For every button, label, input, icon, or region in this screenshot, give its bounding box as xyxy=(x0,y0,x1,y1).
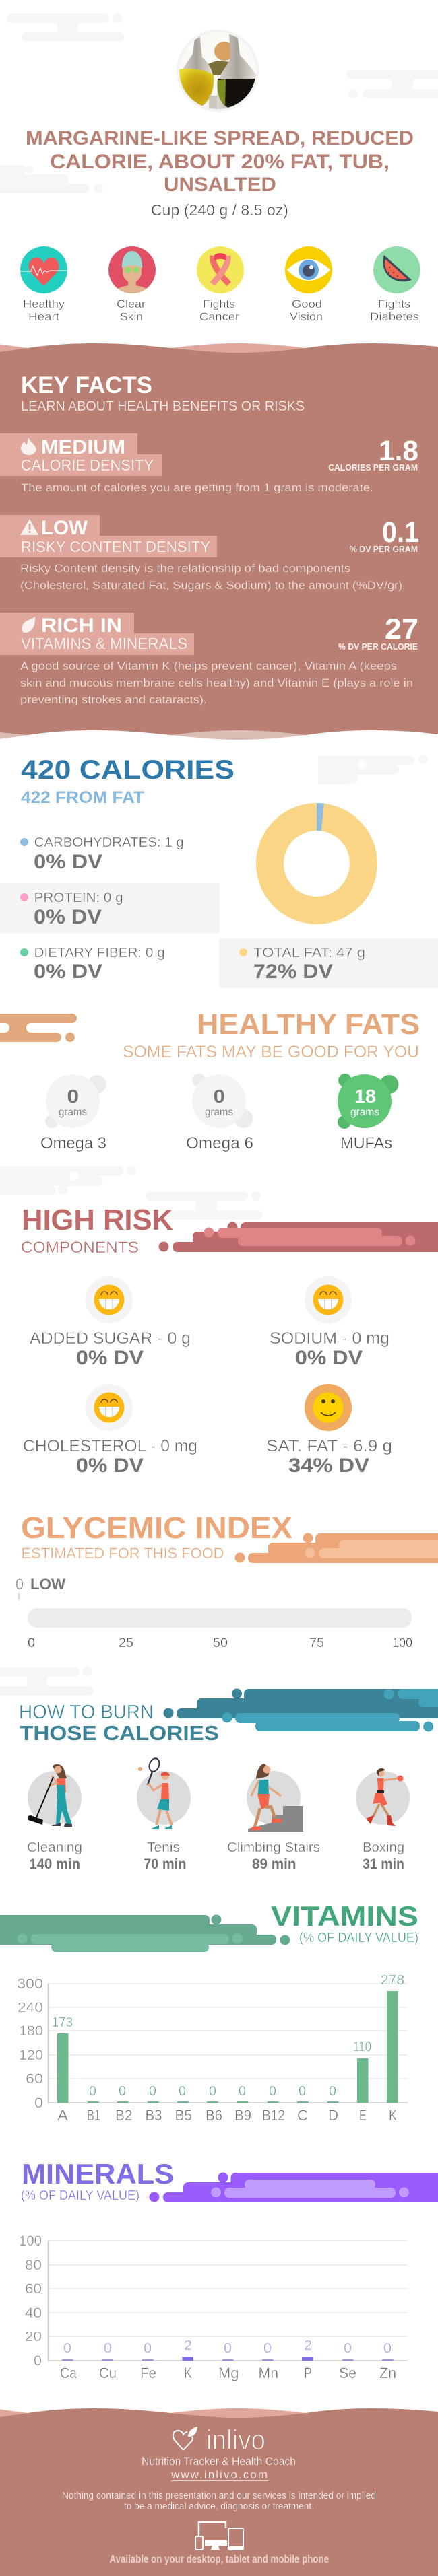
fact: risky content density: 0.1 xyxy=(382,516,419,549)
bar chart: vitamins: 300 xyxy=(17,1976,43,1992)
activity: cleaning: Cleaning xyxy=(27,1840,82,1855)
activity: tennis xyxy=(137,1757,191,1872)
bar chart: vitamins: B1 xyxy=(87,2107,100,2124)
bar chart: minerals: 0 xyxy=(224,2341,232,2356)
stat: omega 6 xyxy=(186,1074,253,1152)
heading: minerals: MINERALS xyxy=(22,2158,174,2190)
title: UNSALTED xyxy=(164,174,276,196)
panel: calories xyxy=(0,755,438,988)
gauge scale: 100 xyxy=(392,1636,412,1650)
background cloud: top right xyxy=(346,70,438,98)
heading: glycemic index: GLYCEMIC INDEX xyxy=(21,1510,292,1545)
fact: calorie density: CALORIES PER GRAM xyxy=(328,462,418,473)
fact: rich in vitamins and minerals: 27 xyxy=(385,613,418,646)
bar chart: minerals: 0 xyxy=(383,2341,392,2356)
stat: MUFAs: MUFAs xyxy=(340,1134,392,1152)
icon: good vision: Vision xyxy=(290,310,323,323)
gauge scale: 50 xyxy=(213,1636,228,1650)
icon: good vision xyxy=(285,246,332,323)
fact: calorie density: The amount of calories you are getting from 1 gram is moderate. xyxy=(21,481,373,494)
gauge value marker: LOW xyxy=(30,1576,65,1593)
stat: omega 6: grams xyxy=(205,1107,233,1118)
bar chart: vitamins: B5 xyxy=(175,2107,192,2124)
stat: MUFAs xyxy=(338,1074,399,1152)
icon: good vision: Good xyxy=(292,298,322,310)
background cloud xyxy=(318,755,428,784)
bar chart: vitamins: 0 xyxy=(329,2084,336,2099)
activity: cleaning xyxy=(27,1764,82,1872)
bar chart: vitamins: B2 xyxy=(115,2107,132,2124)
bar chart: minerals: Mn xyxy=(259,2365,278,2381)
subheading: glycemic index: ESTIMATED FOR THIS FOOD xyxy=(22,1545,224,1562)
gauge value marker: 0 xyxy=(15,1576,24,1593)
icon: clear skin xyxy=(108,246,156,323)
gauge value marker xyxy=(15,1576,65,1600)
bar chart: minerals: P xyxy=(304,2365,312,2381)
disclaimer xyxy=(62,2490,376,2512)
bar chart: vitamins: 120 xyxy=(19,2048,43,2063)
logo: inlivo xyxy=(173,2424,265,2456)
bar chart: vitamins: 278 xyxy=(381,1973,404,1988)
activity: climbing stairs: 89 min xyxy=(252,1856,296,1872)
bar chart: minerals: Mg xyxy=(218,2365,239,2381)
panel: how to burn those calories xyxy=(19,1688,438,1872)
heading: those calories: THOSE CALORIES xyxy=(20,1721,219,1745)
tagline: Nutrition Tracker & Health Coach xyxy=(142,2455,296,2468)
fact: risky content density: (Cholesterol, Saturated Fat, Sugars & Sodium) to the amount (%DV/gr). xyxy=(20,579,406,592)
fact: calorie density xyxy=(0,433,418,494)
panel: minerals xyxy=(19,2158,438,2381)
subheading: from fat: 422 FROM FAT xyxy=(21,788,144,807)
bar chart: minerals: Cu xyxy=(99,2365,117,2381)
heading: key facts: KEY FACTS xyxy=(21,372,152,398)
bar chart: minerals: 100 xyxy=(19,2233,42,2249)
item: added sugar: 0% DV xyxy=(76,1347,144,1369)
legend: dietary fiber xyxy=(20,946,165,983)
activity: tennis: Tenis xyxy=(147,1840,180,1855)
bar chart: minerals: 20 xyxy=(25,2329,42,2344)
icon: fights diabetes xyxy=(370,246,420,323)
bar chart: minerals: Fe xyxy=(140,2365,156,2381)
serving size: Cup (240 g / 8.5 oz) xyxy=(151,201,288,219)
fact: risky content density: % DV PER GRAM xyxy=(350,544,418,554)
bar chart: minerals: 0 xyxy=(63,2341,71,2356)
availability note: Available on your desktop, tablet and mobile phone xyxy=(109,2554,329,2565)
bar chart: minerals: 2 xyxy=(184,2338,192,2353)
panel: footer xyxy=(0,2408,438,2576)
bar chart: vitamins: 0 xyxy=(299,2084,306,2099)
item: added sugar xyxy=(30,1276,191,1369)
logo: inlivo: inlivo xyxy=(206,2424,265,2456)
bar chart: minerals: 0 xyxy=(104,2341,112,2356)
item: cholesterol: 0% DV xyxy=(76,1455,144,1477)
icon: fights cancer xyxy=(197,246,244,323)
decorative bars: high risk xyxy=(159,1222,438,1252)
heading: healthy fats: HEALTHY FATS xyxy=(197,1008,420,1041)
gauge scale: 0 xyxy=(28,1636,35,1650)
bar chart: vitamins: A xyxy=(57,2107,68,2124)
legend: protein: PROTEIN: 0 g xyxy=(34,891,123,905)
legend: protein xyxy=(0,883,220,933)
fact: risky content density: LOW xyxy=(41,517,88,539)
fact: rich in vitamins and minerals: skin and mucous membrane cells healthy) and Vitamin E (plays a role in xyxy=(20,676,413,689)
item: saturated fat xyxy=(266,1384,392,1477)
food photo: oil and vinegar flasks xyxy=(175,30,263,112)
stat: MUFAs: 18 xyxy=(354,1086,376,1107)
fact: risky content density: Risky Content density is the relationship of bad components xyxy=(20,562,350,575)
bar chart: vitamins xyxy=(17,1973,408,2124)
fact: risky content density: RISKY CONTENT DENSITY xyxy=(21,538,210,555)
bar chart: vitamins: D xyxy=(328,2107,338,2124)
stat: omega 6: 0 xyxy=(213,1086,225,1107)
heading: high risk: HIGH RISK xyxy=(22,1204,173,1237)
subheading: vitamins unit: (% OF DAILY VALUE) xyxy=(299,1930,418,1945)
stat: omega 3 xyxy=(40,1074,106,1152)
bar chart: minerals: 0 xyxy=(144,2341,152,2356)
icon: healthy heart: Healthy xyxy=(23,298,65,310)
bar chart: vitamins: B6 xyxy=(206,2107,222,2124)
legend: protein: 0% DV xyxy=(34,906,102,928)
panel: key facts xyxy=(0,343,438,744)
heading: 420 calories: 420 CALORIES xyxy=(21,755,234,785)
activity: boxing xyxy=(356,1768,410,1872)
activity: tennis: 70 min xyxy=(144,1856,186,1872)
bar chart: vitamins: C xyxy=(297,2107,308,2124)
heading: how to burn: HOW TO BURN xyxy=(19,1702,154,1723)
gauge scale: 25 xyxy=(119,1636,133,1650)
bar chart: vitamins: 60 xyxy=(26,2071,43,2087)
subheading: healthy fats: SOME FATS MAY BE GOOD FOR YOU xyxy=(123,1043,419,1061)
activity: climbing stairs xyxy=(227,1764,320,1872)
activity: climbing stairs: Climbing Stairs xyxy=(227,1840,320,1855)
disclaimer: to be a medical advice, diagnosis or treatment. xyxy=(124,2501,314,2512)
bar chart: minerals: 2 xyxy=(304,2338,312,2353)
bar chart: vitamins: 0 xyxy=(239,2084,246,2099)
bar chart: vitamins: 180 xyxy=(19,2023,43,2039)
gauge track xyxy=(28,1608,412,1628)
activity: cleaning: 140 min xyxy=(30,1856,80,1872)
legend: total fat: TOTAL FAT: 47 g xyxy=(253,946,365,961)
heading: vitamins: VITAMINS xyxy=(271,1900,418,1932)
icon: fights cancer: Fights xyxy=(203,298,235,310)
fact: calorie density: 1.8 xyxy=(379,435,418,467)
title xyxy=(26,127,414,196)
legend: dietary fiber: 0% DV xyxy=(34,961,102,983)
bar chart: vitamins: 0 xyxy=(209,2084,216,2099)
panel: high risk components xyxy=(21,1204,438,1477)
fact: rich in vitamins and minerals: preventing strokes and cataracts). xyxy=(20,693,207,706)
stat: omega 6: Omega 6 xyxy=(186,1134,253,1152)
bar chart: minerals: K xyxy=(184,2365,192,2381)
legend: carbohydrates xyxy=(20,835,184,873)
stat: MUFAs: grams xyxy=(350,1107,379,1118)
bar chart: vitamins: 0 xyxy=(34,2095,43,2111)
fact: risky content density xyxy=(0,515,419,592)
bar chart: vitamins: 0 xyxy=(269,2084,276,2099)
background cloud: top left xyxy=(7,13,124,42)
panel: vitamins xyxy=(0,1900,418,2124)
item: added sugar: ADDED SUGAR - 0 g xyxy=(30,1329,191,1348)
stat: omega 3: Omega 3 xyxy=(40,1134,106,1152)
icon: clear skin: Skin xyxy=(120,310,143,323)
activity: boxing: Boxing xyxy=(363,1840,404,1855)
background clouds: above high risk xyxy=(0,1166,263,1220)
decorative bars: vitamins xyxy=(0,1914,290,1952)
bar chart: minerals: Se xyxy=(339,2365,356,2381)
bar chart: vitamins: 0 xyxy=(89,2084,96,2099)
icon: healthy heart xyxy=(20,246,67,323)
icon: fights diabetes: Diabetes xyxy=(370,310,419,323)
panel: glycemic index xyxy=(15,1510,438,1650)
icon: fights cancer: Cancer xyxy=(199,310,239,323)
item: saturated fat: SAT. FAT - 6.9 g xyxy=(266,1437,392,1455)
website link: www.inlivo.com xyxy=(170,2468,268,2481)
gauge scale xyxy=(28,1636,412,1650)
bar chart: minerals: 80 xyxy=(25,2258,42,2273)
item: saturated fat: 34% DV xyxy=(288,1455,369,1477)
decorative bars: glycemic index xyxy=(234,1533,438,1563)
fact: rich in vitamins and minerals: VITAMINS & MINERALS xyxy=(21,635,187,652)
fact: rich in vitamins and minerals xyxy=(0,613,418,706)
item: sodium: 0% DV xyxy=(295,1347,363,1369)
icon: clear skin: Clear xyxy=(117,298,146,310)
benefit icons row xyxy=(20,246,420,323)
item: cholesterol: CHOLESTEROL - 0 mg xyxy=(23,1437,197,1455)
fact: rich in vitamins and minerals: A good source of Vitamin K (helps prevent cancer), Vitamin A (keeps xyxy=(20,660,397,672)
gauge scale: 75 xyxy=(309,1636,324,1650)
item: sodium xyxy=(270,1276,389,1369)
icon: devices xyxy=(195,2522,243,2550)
legend: total fat xyxy=(219,938,438,988)
title: CALORIE, ABOUT 20% FAT, TUB, xyxy=(50,151,389,173)
fact: rich in vitamins and minerals: % DV PER CALORIE xyxy=(338,641,418,652)
bar chart: minerals: Zn xyxy=(379,2365,396,2381)
stat: omega 3: grams xyxy=(59,1107,87,1118)
legend: total fat: 72% DV xyxy=(253,961,333,983)
subheading: key facts: LEARN ABOUT HEALTH BENEFITS OR RISKS xyxy=(21,398,305,414)
bar chart: vitamins: 173 xyxy=(52,2015,73,2030)
bar chart: vitamins: B12 xyxy=(262,2107,285,2124)
icon: fights diabetes: Fights xyxy=(378,298,410,310)
bar chart: vitamins: B9 xyxy=(234,2107,251,2124)
bar chart: vitamins: E xyxy=(359,2107,367,2124)
bar chart: minerals: 60 xyxy=(25,2281,42,2297)
bar chart: vitamins: 240 xyxy=(18,2000,43,2015)
decorative bars: minerals xyxy=(150,2173,438,2202)
decorative bars: burn xyxy=(163,1688,438,1731)
bar chart: minerals: 0 xyxy=(344,2341,352,2356)
stat: omega 3: 0 xyxy=(67,1086,79,1107)
legend: carbohydrates: 0% DV xyxy=(34,851,102,873)
subheading: components: COMPONENTS xyxy=(21,1239,139,1257)
bar chart: vitamins: 0 xyxy=(149,2084,156,2099)
item: cholesterol xyxy=(23,1384,197,1477)
fact: calorie density: CALORIE DENSITY xyxy=(21,456,154,474)
legend: carbohydrates: CARBOHYDRATES: 1 g xyxy=(34,835,184,850)
bar chart: minerals: 0 xyxy=(263,2341,272,2356)
bar chart: minerals: 40 xyxy=(25,2305,42,2321)
bar chart: vitamins: 110 xyxy=(353,2040,371,2054)
bar chart: minerals xyxy=(19,2233,408,2381)
fact: calorie density: MEDIUM xyxy=(41,436,125,458)
panel: healthy fats xyxy=(0,1008,420,1152)
bar chart: minerals: Ca xyxy=(60,2365,77,2381)
title: MARGARINE-LIKE SPREAD, REDUCED xyxy=(26,127,414,149)
item: sodium: SODIUM - 0 mg xyxy=(270,1329,389,1348)
background cloud: left of title xyxy=(0,165,103,193)
bar chart: vitamins: K xyxy=(389,2107,397,2124)
icon: healthy heart: Heart xyxy=(28,310,59,323)
bar chart: vitamins: 0 xyxy=(119,2084,126,2099)
legend: dietary fiber: DIETARY FIBER: 0 g xyxy=(34,946,165,961)
donut chart xyxy=(270,803,364,910)
decorative bars: healthy fats xyxy=(0,1014,77,1042)
bar chart: vitamins: B3 xyxy=(146,2107,162,2124)
disclaimer: Nothing contained in this presentation and our services is intended or implied xyxy=(62,2490,376,2501)
subheading: minerals unit: (% OF DAILY VALUE) xyxy=(21,2188,139,2203)
bar chart: vitamins: 0 xyxy=(179,2084,186,2099)
activity: boxing: 31 min xyxy=(363,1856,404,1872)
bar chart: minerals: 0 xyxy=(34,2353,42,2369)
fact: rich in vitamins and minerals: RICH IN xyxy=(41,615,122,637)
background cloud: above burn section xyxy=(0,1667,94,1696)
